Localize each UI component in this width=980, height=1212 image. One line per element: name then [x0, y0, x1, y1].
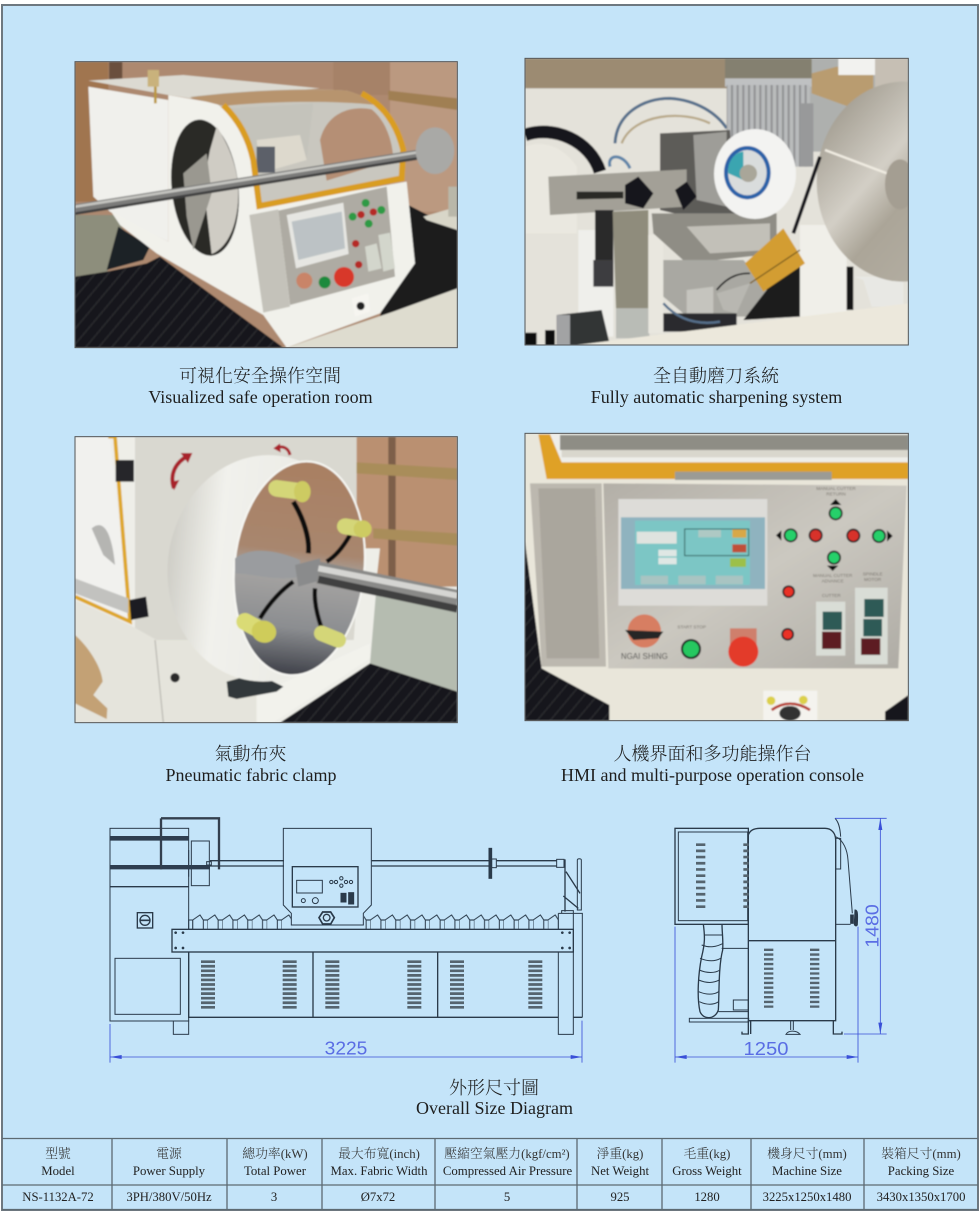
table header: 最大布寬(inch) [338, 1146, 420, 1161]
caption: fully automatic sharpening system: 全自動磨刀系統 [653, 366, 779, 386]
dimensions: 1250 and 1480 [675, 818, 887, 1063]
caption: pneumatic fabric clamp: Pneumatic fabric clamp [166, 765, 336, 785]
photo: pneumatic fabric clamp [75, 437, 457, 723]
table header: Net Weight [591, 1164, 649, 1178]
caption: HMI and multi-purpose operation console: HMI and multi-purpose operation console [561, 765, 864, 785]
table header: 裝箱尺寸(mm) [881, 1146, 961, 1161]
caption: fully automatic sharpening system [591, 366, 842, 407]
table values: 3 [271, 1190, 277, 1204]
specification table [2, 1138, 978, 1210]
photo: HMI and multi-purpose operation console: MOTOR [864, 577, 882, 582]
table header: Compressed Air Pressure [443, 1164, 573, 1178]
caption: overall size diagram [416, 1078, 573, 1118]
table values: 3PH/380V/50Hz [126, 1190, 212, 1204]
caption: visualized safe operation room: 可視化安全操作空間 [179, 366, 341, 386]
diagram: front elevation [110, 818, 582, 1063]
caption: overall size diagram: Overall Size Diagram [416, 1098, 573, 1118]
photo: HMI and multi-purpose operation console: CUTTER [822, 593, 841, 598]
rivets [174, 931, 571, 949]
caption: visualized safe operation room: Visualized safe operation room [148, 387, 373, 407]
table header: 毛重(kg) [684, 1147, 730, 1161]
vents [701, 843, 746, 910]
caption: visualized safe operation room [148, 366, 373, 407]
table header: 總功率(kW) [242, 1147, 308, 1161]
dimensions: 1250 and 1480: 1480 [861, 904, 882, 948]
photo: HMI and multi-purpose operation console: ADVANCE [822, 578, 844, 583]
diagram: side elevation [675, 818, 887, 1063]
caption: HMI and multi-purpose operation console [561, 744, 864, 785]
table header: 壓縮空氣壓力(kgf/cm²) [444, 1146, 570, 1161]
photo: HMI and multi-purpose operation console: START STOP [677, 624, 706, 629]
photo: HMI and multi-purpose operation console: RETURN [826, 492, 846, 497]
table header [41, 1146, 961, 1178]
photo: HMI and multi-purpose operation console: MANUAL CUTTER [816, 486, 856, 491]
table header: Total Power [244, 1164, 307, 1178]
table values: 925 [610, 1190, 630, 1204]
table header: 型號 [45, 1146, 71, 1161]
photo: HMI and multi-purpose operation console [525, 433, 908, 721]
table header: Gross Weight [672, 1164, 742, 1178]
photo: HMI and multi-purpose operation console: SPINDLE [863, 572, 883, 577]
caption: fully automatic sharpening system: Fully automatic sharpening system [591, 387, 842, 407]
dimensions: 1250 and 1480: 1250 [743, 1038, 788, 1059]
photo: HMI and multi-purpose operation console: MANUAL CUTTER [813, 573, 853, 578]
photo: visualized safe operation room [75, 62, 457, 348]
caption: pneumatic fabric clamp: 氣動布夾 [214, 744, 286, 764]
caption: pneumatic fabric clamp [166, 744, 336, 785]
table header: Max. Fabric Width [330, 1164, 428, 1178]
caption: overall size diagram: 外形尺寸圖 [449, 1078, 539, 1098]
table values [22, 1190, 965, 1204]
table values: 3225x1250x1480 [763, 1190, 851, 1204]
caption: HMI and multi-purpose operation console: 人機界面和多功能操作台 [614, 744, 812, 764]
table values: Ø7x72 [361, 1190, 395, 1204]
table values: 5 [504, 1190, 510, 1204]
dimension: 3225: 3225 [325, 1037, 367, 1058]
table header: 電源 [156, 1147, 182, 1161]
photo: HMI and multi-purpose operation console: NGAI SHING [621, 652, 668, 661]
table header: 機身尺寸(mm) [767, 1146, 847, 1161]
table values: 3430x1350x1700 [877, 1190, 965, 1204]
vents [208, 960, 535, 1011]
table header: 淨重(kg) [597, 1147, 643, 1161]
table values: NS-1132A-72 [22, 1190, 94, 1204]
table header: Model [41, 1164, 75, 1178]
table header: Packing Size [888, 1164, 955, 1178]
photo: fully automatic sharpening system [524, 58, 909, 346]
table values: 1280 [694, 1190, 720, 1204]
table header: Machine Size [772, 1164, 842, 1178]
dimension: 3225 [110, 1021, 582, 1063]
table header: Power Supply [133, 1164, 206, 1178]
